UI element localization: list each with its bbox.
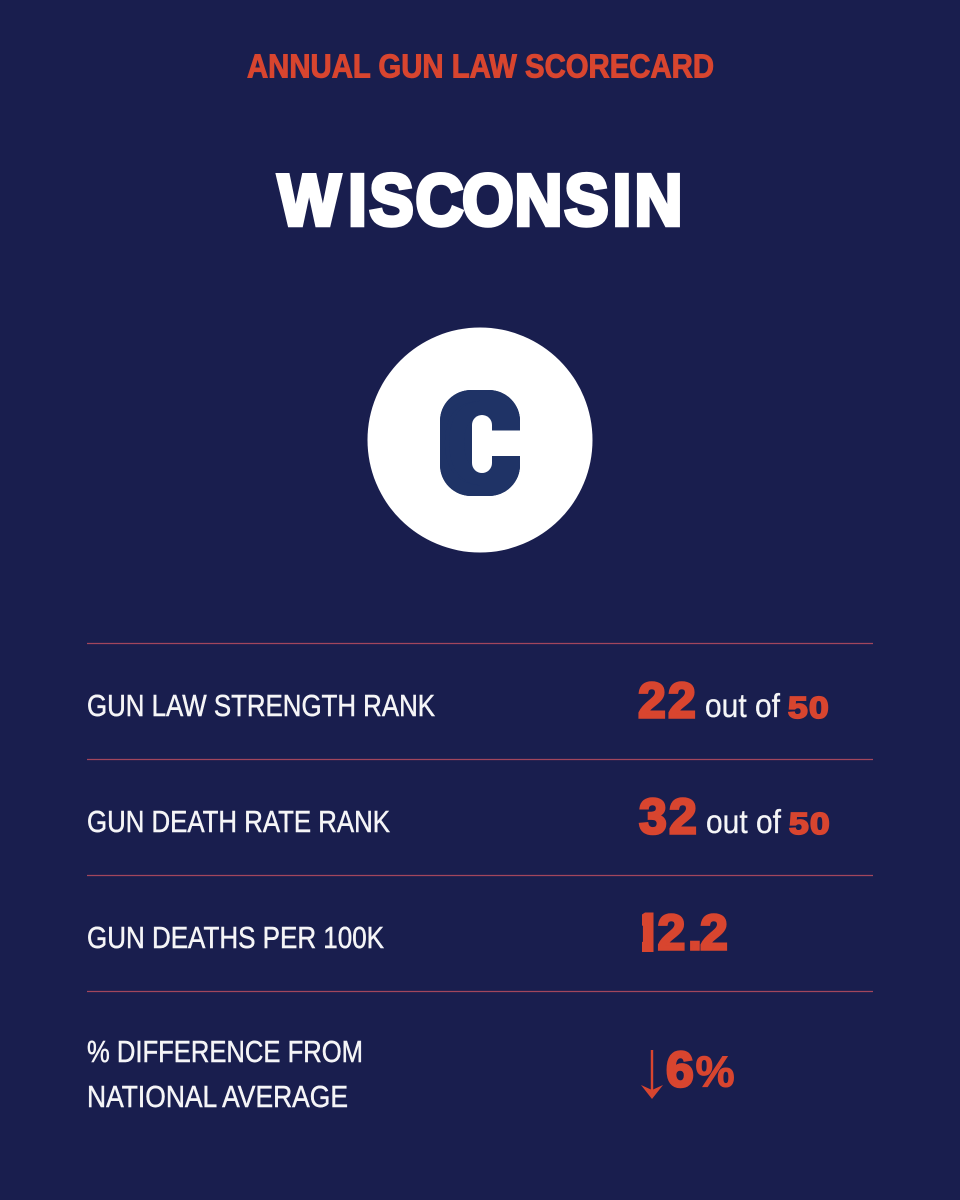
row: gun law strength rank [87,672,829,728]
value: 22 out of 50: out of [705,687,781,724]
value: 32 out of 50 [639,788,830,844]
value: 32 out of 50: out of [706,803,782,840]
row: gun death rate rank [87,788,830,844]
row: percent difference from national average [87,1034,735,1114]
value: 22 out of 50 [638,672,829,728]
value: 22 out of 50: 22 [638,672,696,728]
label: gun death rate rank: GUN DEATH RATE RANK [87,804,390,839]
scorecard infographic [87,54,873,1108]
value: 22 out of 50: 50 [788,691,829,725]
eyebrow heading: ANNUAL GUN LAW SCORECARD [247,48,714,84]
value: 12.2: 1 [634,904,662,960]
value: 32 out of 50: 50 [789,807,830,841]
grade badge [368,328,592,552]
value: 32 out of 50: 32 [639,788,697,844]
label: percent difference from national average: NATIONAL AVERAGE [87,1079,348,1114]
value: 12.2: 2.2 [658,904,728,960]
label: gun law strength rank: GUN LAW STRENGTH RANK [87,688,435,723]
icon: down arrow [641,1050,663,1099]
state title: WISCONSIN [278,160,682,241]
value: 12.2 [642,912,728,952]
value: 6%: % [696,1048,735,1096]
grade badge: C [432,364,528,523]
value: 6%: 6 [666,1042,694,1098]
row: gun deaths per 100k [88,912,728,952]
label: percent difference from national average: % DIFFERENCE FROM [87,1034,363,1069]
label: gun deaths per 100k: GUN DEATHS PER 100K [87,920,384,955]
label: percent difference from national average [87,1034,363,1114]
